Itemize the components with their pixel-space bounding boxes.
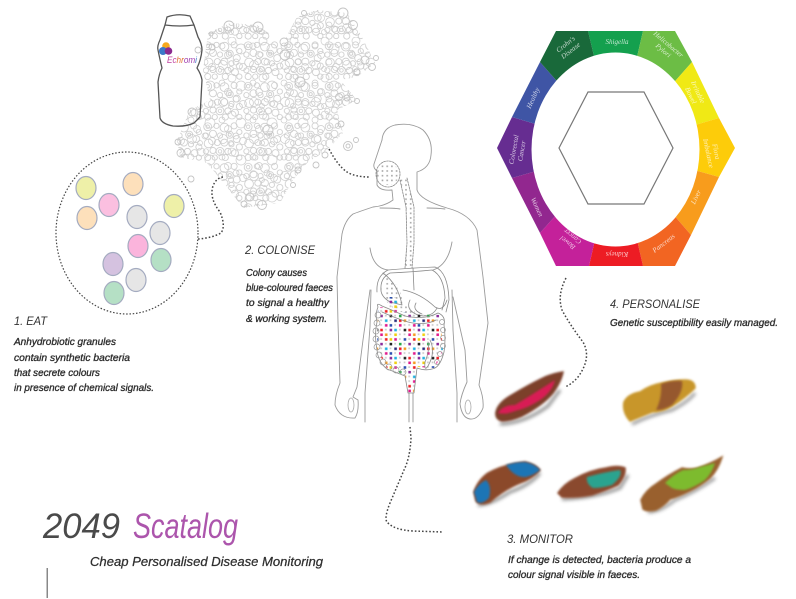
text: 2. COLONISE bbox=[244, 243, 334, 325]
sample: red faeces bbox=[496, 372, 563, 424]
text: 2. COLONISE: & working system. bbox=[246, 313, 327, 325]
stomach bbox=[403, 290, 447, 316]
text: 1. EAT: 1. EAT bbox=[14, 314, 49, 328]
text: 3. MONITOR: colour signal visible in faeces. bbox=[508, 569, 640, 581]
sample: ochre faeces bbox=[624, 380, 695, 424]
wheel labels: Cancer bbox=[562, 227, 583, 246]
vertical cursor line bbox=[46, 568, 48, 598]
wheel labels: Colorectal bbox=[508, 134, 521, 165]
title: 2049 bbox=[42, 507, 120, 546]
wheel segments bbox=[497, 31, 735, 266]
text: 4. PERSONALISE: 4. PERSONALISE bbox=[610, 297, 701, 311]
text: 4. PERSONALISE: Genetic susceptibility easily managed. bbox=[610, 317, 778, 329]
text: 1. EAT: Anhydrobiotic granules bbox=[13, 336, 117, 348]
wheel labels: Pylori bbox=[653, 41, 672, 59]
mouth and oesophagus bbox=[376, 161, 414, 290]
arrow: body to monitor bbox=[386, 427, 442, 532]
text: 3. MONITOR: If change is detected, bacteria produce a bbox=[508, 554, 691, 566]
arrow: wheel to samples bbox=[560, 278, 587, 387]
panel: granule circle bbox=[56, 152, 198, 314]
logo wordmark: Echromi bbox=[167, 55, 198, 66]
text: 2. COLONISE: blue-coloured faeces bbox=[246, 282, 334, 294]
wheel labels: Bowel bbox=[558, 234, 577, 251]
wheel labels: Healthy bbox=[524, 86, 542, 111]
wheel labels: Kidneys bbox=[605, 250, 629, 258]
subtitle: Cheap Personalised Disease Monitoring bbox=[90, 554, 324, 569]
wheel labels: Irritable bbox=[689, 79, 706, 105]
wheel labels: Pancreas bbox=[650, 232, 677, 255]
arrow: colony to mouth bbox=[329, 149, 370, 177]
text: 1. EAT: contain synthetic bacteria bbox=[14, 352, 130, 364]
intestines bbox=[373, 297, 446, 393]
bacteria colony cloud bbox=[175, 8, 378, 210]
bottle with Echromi logo bbox=[158, 15, 202, 126]
wheel labels: Liver bbox=[689, 189, 703, 206]
colour wheel hexagon bbox=[497, 29, 735, 266]
title bbox=[42, 507, 238, 546]
text: 1. EAT: that secrete colours bbox=[14, 367, 101, 379]
wheel labels: Cancer bbox=[516, 140, 528, 162]
inner hexagon bbox=[559, 92, 673, 204]
text: 3. MONITOR: 3. MONITOR bbox=[507, 532, 573, 546]
human body with digestive system bbox=[335, 124, 488, 422]
text: 2. COLONISE: 2. COLONISE bbox=[244, 243, 316, 257]
wheel labels: Shigella bbox=[606, 38, 629, 46]
wheel labels: Imbalance bbox=[701, 137, 715, 169]
white centre bbox=[532, 52, 700, 246]
sample: blue faeces bbox=[474, 462, 540, 505]
wheel labels bbox=[508, 29, 723, 258]
text: 4. PERSONALISE bbox=[610, 297, 778, 329]
wheel labels: Disease bbox=[559, 41, 582, 61]
wheel labels: Crohn's bbox=[555, 34, 577, 54]
text: 3. MONITOR bbox=[507, 532, 691, 581]
wheel labels: Helicobacter bbox=[651, 29, 685, 59]
body outline bbox=[335, 124, 488, 422]
text: 2. COLONISE: to signal a healthy bbox=[246, 297, 330, 309]
text: 1. EAT bbox=[13, 314, 154, 394]
wheel labels: Bowel bbox=[683, 86, 698, 105]
logo circles bbox=[159, 42, 172, 55]
wheel labels: Women bbox=[529, 196, 545, 219]
wheel labels: Flora bbox=[710, 142, 722, 161]
text: 2. COLONISE: Colony causes bbox=[246, 267, 308, 279]
text: 1. EAT: in presence of chemical signals. bbox=[14, 382, 154, 394]
title: Scatalog bbox=[133, 507, 238, 546]
liver bbox=[377, 267, 449, 316]
rectum tube bbox=[409, 393, 413, 422]
arrow: granules to colony bbox=[198, 177, 223, 239]
sample: green faeces bbox=[641, 457, 722, 512]
sample: teal faeces bbox=[558, 466, 628, 499]
bottle outline bbox=[158, 15, 202, 126]
